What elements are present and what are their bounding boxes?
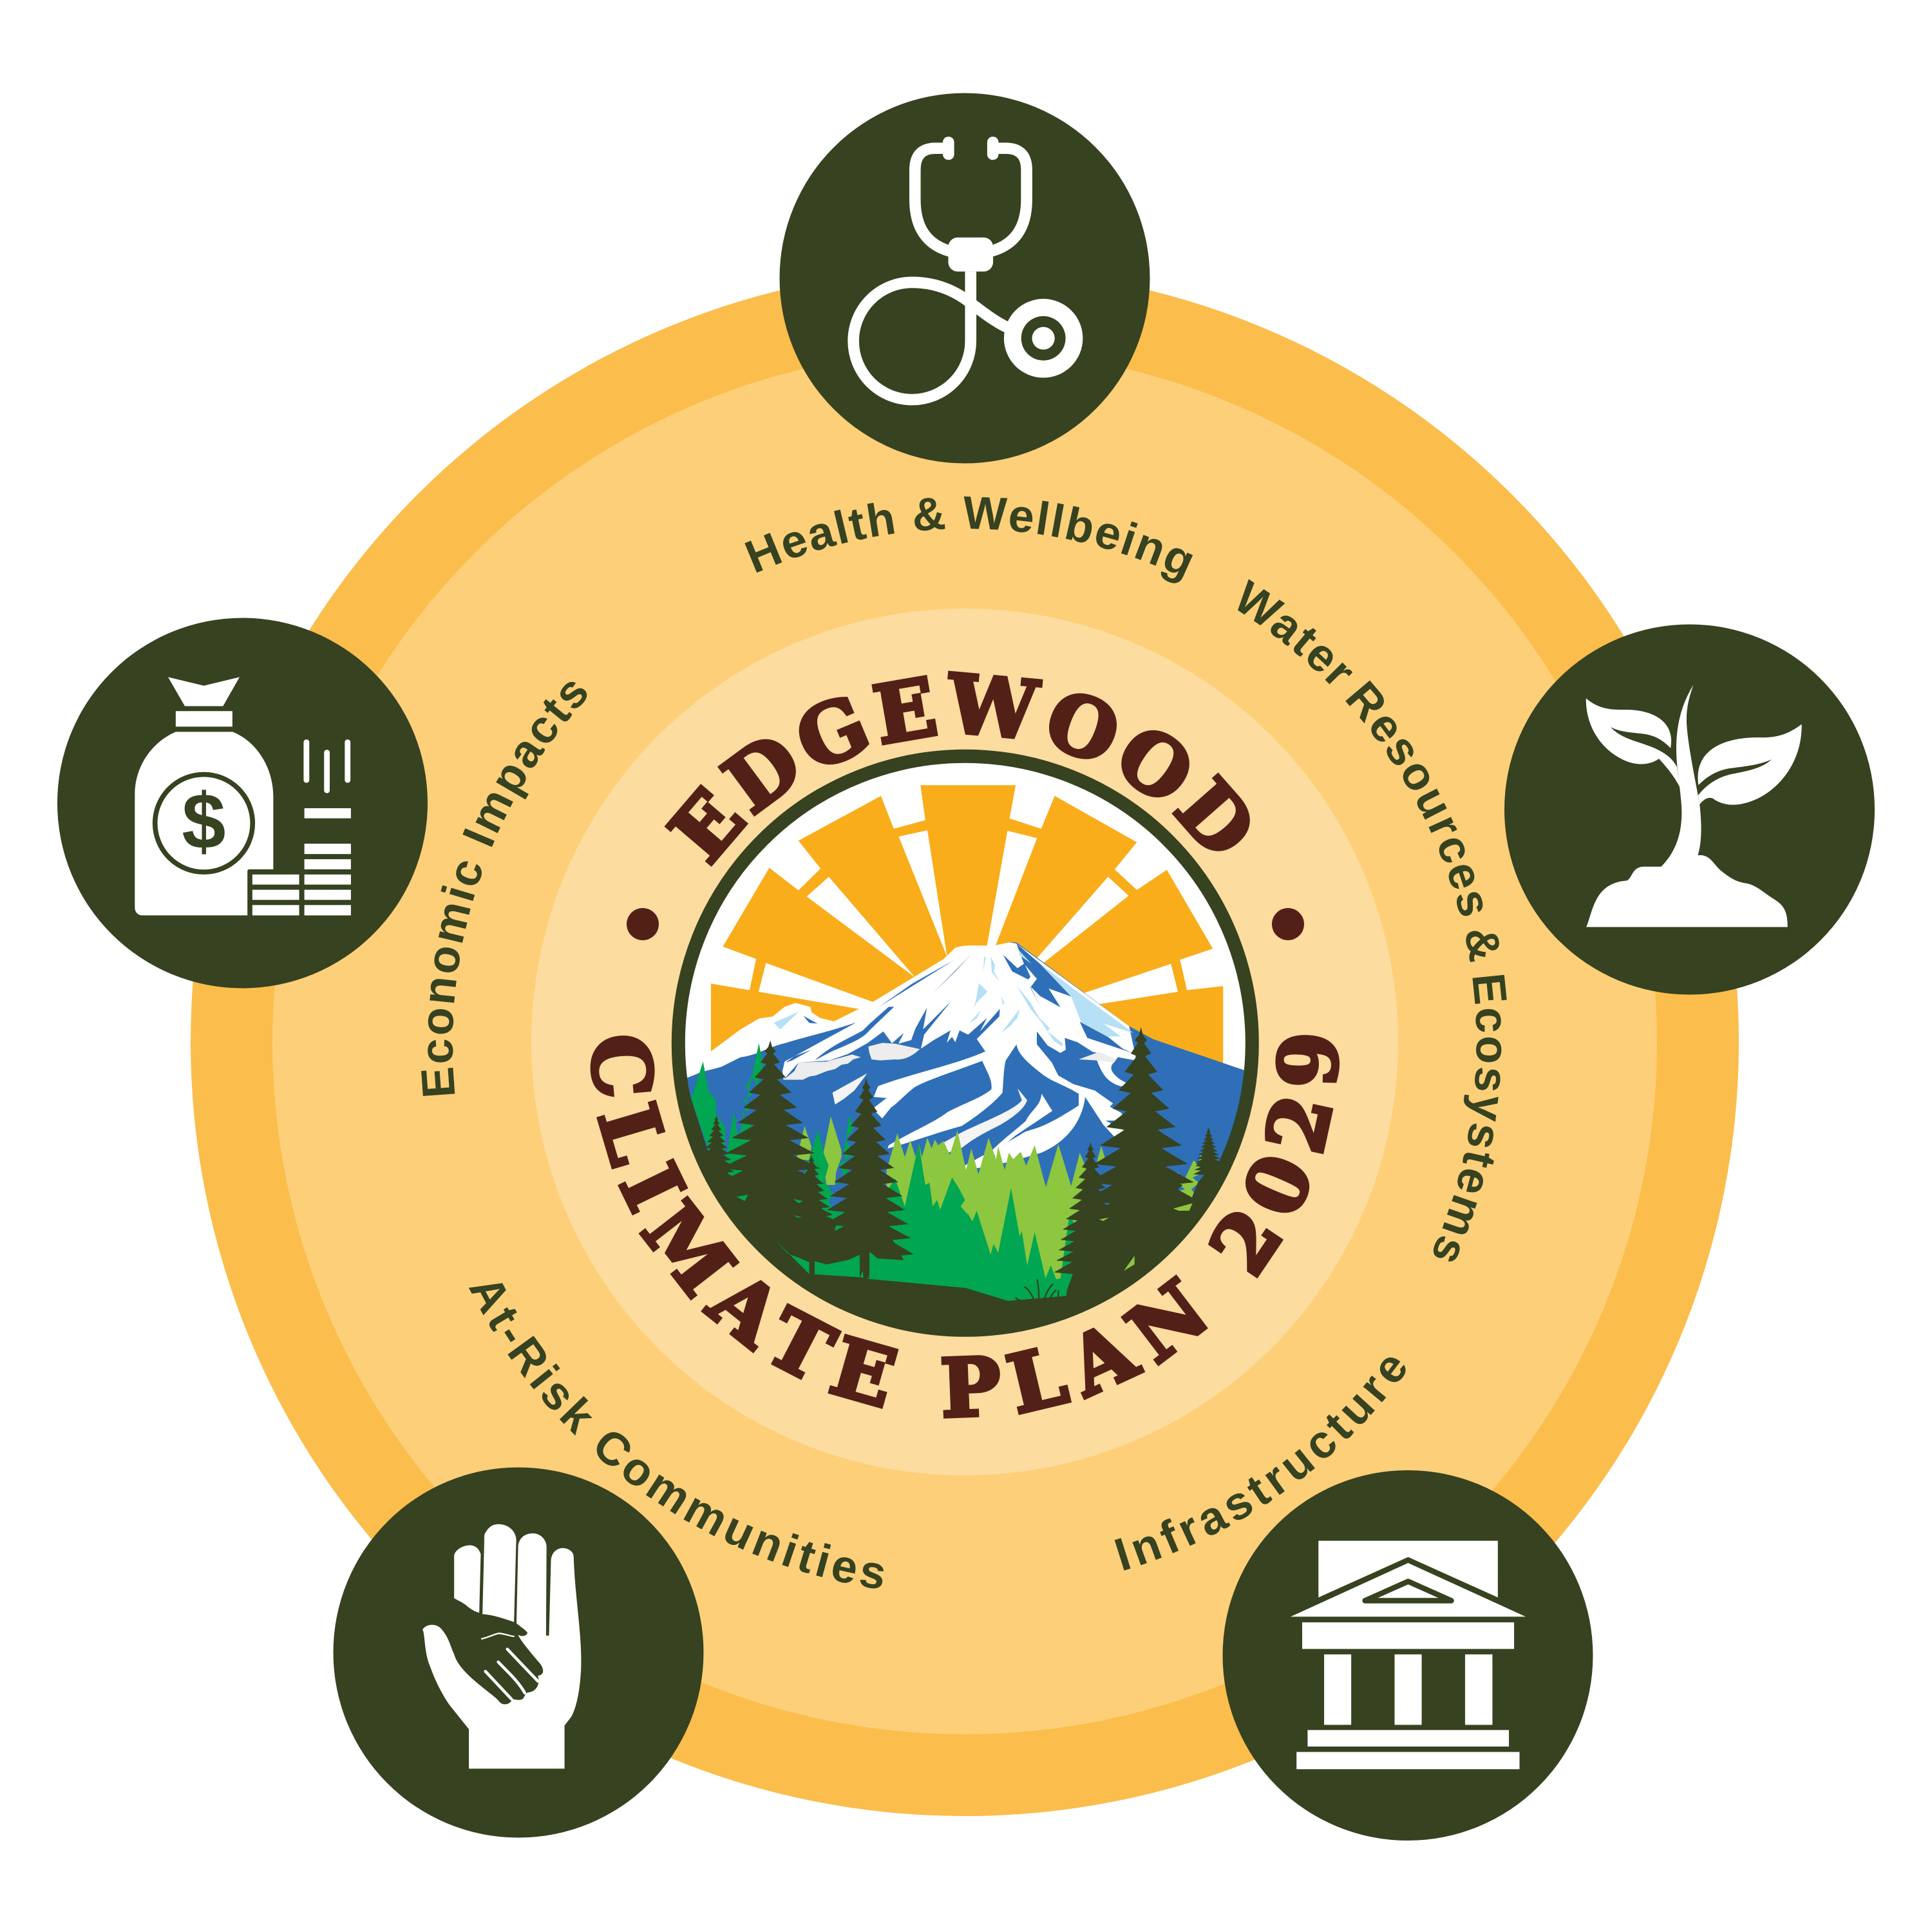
conifer trees xyxy=(694,1027,1224,1290)
label: Water Resources & Ecosystems: Water Resources & Ecosystems xyxy=(1238,579,1507,1262)
middle ring xyxy=(272,350,1657,1734)
light green forest xyxy=(886,1130,1086,1280)
icon: stethoscope xyxy=(853,137,1083,400)
left dot xyxy=(627,908,659,940)
title: Edgewood: EDGEWOOD xyxy=(665,671,1250,867)
distant snowy peak xyxy=(705,1003,855,1072)
label: Infrastructure: Infrastructure xyxy=(1114,1358,1405,1571)
left forest xyxy=(691,1043,855,1222)
lower right snow ridges xyxy=(965,1041,1136,1170)
logo: mountain and sunburst xyxy=(668,756,1256,1365)
lower snow strip xyxy=(944,1088,1027,1153)
rock streaks on the upper slope xyxy=(786,954,972,1063)
icon: money bag with coins xyxy=(135,677,351,915)
label: Economic Impacts: Economic Impacts xyxy=(421,681,587,1096)
icon: seedling xyxy=(1586,685,1802,927)
badge: seedling (water and ecosystems) xyxy=(1504,625,1875,994)
ground hill xyxy=(689,1091,1066,1323)
right slope details xyxy=(969,943,1133,1053)
dark tree mass on the left xyxy=(708,1153,916,1280)
dark green forest xyxy=(775,1143,1075,1301)
upper snow band xyxy=(873,1052,985,1119)
grey snow shadows xyxy=(784,1043,920,1104)
inner ring xyxy=(531,609,1398,1475)
icon: money bag with coins: $ xyxy=(182,777,226,865)
badge: money bag (economic impacts) xyxy=(57,618,428,988)
badge: helping hands (at-risk communities) xyxy=(334,1467,703,1838)
label: Health & Wellbeing: Health & Wellbeing xyxy=(744,496,1193,583)
icon: civic building xyxy=(1291,1540,1526,1769)
sun rays xyxy=(711,785,1223,1070)
icon: helping hands xyxy=(422,1524,581,1768)
title: Climate Plan 2029: CLIMATE PLAN 2029 xyxy=(590,1035,1340,1419)
mountain and forest scene xyxy=(687,942,1244,1323)
central ridge arm xyxy=(887,1041,1016,1148)
badge: civic building (infrastructure) xyxy=(1222,1470,1593,1841)
outer ring xyxy=(191,268,1739,1816)
dark tree mass on the right xyxy=(1066,1161,1219,1297)
grass tufts xyxy=(1015,1279,1059,1300)
blue mountain base xyxy=(687,942,1244,1213)
snow cap xyxy=(782,942,1135,1080)
right dot xyxy=(1272,908,1304,940)
right light green trees xyxy=(1097,1146,1206,1199)
badge: stethoscope (health) xyxy=(779,93,1150,464)
logo ring xyxy=(678,756,1252,1330)
label: At-Risk Communities: At-Risk Communities xyxy=(469,1283,884,1588)
